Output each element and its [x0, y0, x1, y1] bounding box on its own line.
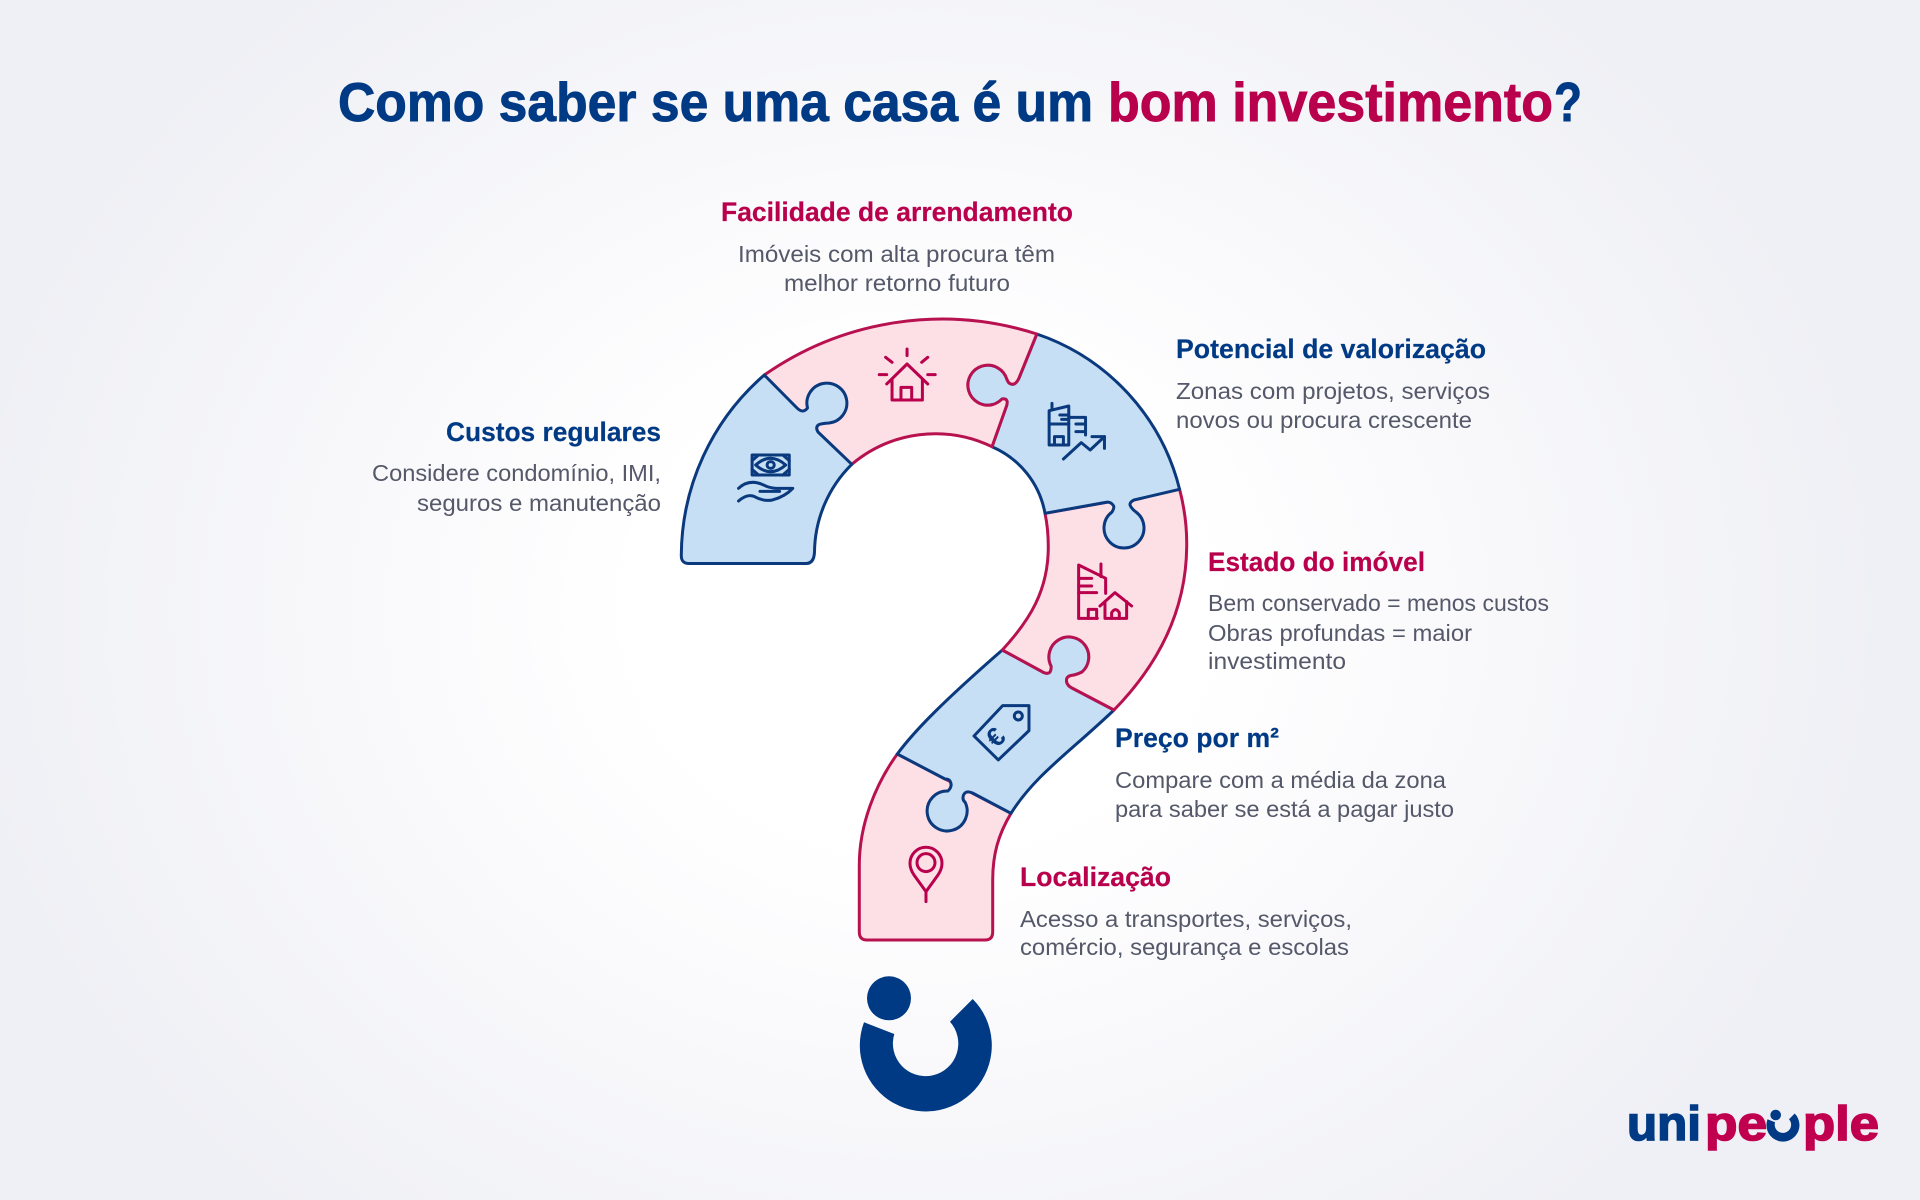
icon: buildings with rising chart	[1049, 403, 1104, 459]
logo: unipeople: pe	[1705, 1098, 1767, 1151]
text: localização: comércio, segurança e escolas	[1020, 934, 1349, 960]
title	[338, 71, 1582, 133]
question mark dot: logo symbol	[860, 976, 992, 1111]
text: custos regulares: Considere condomínio, IMI,	[372, 460, 661, 486]
text: localização	[1020, 862, 1352, 960]
text: estado do imóvel: Bem conservado = menos custos	[1208, 590, 1549, 616]
icon: money in hand	[739, 455, 793, 501]
icon: price tag with euro: €	[980, 721, 1012, 753]
text: estado do imóvel: Obras profundas = maior	[1208, 620, 1472, 646]
title: ?	[1554, 71, 1582, 133]
text: potencial de valorização: Potencial de valorização	[1176, 334, 1486, 364]
piece: localização	[859, 754, 1011, 940]
text: estado do imóvel: Estado do imóvel	[1208, 547, 1425, 577]
icon: location pin	[910, 847, 942, 902]
piece: estado do imóvel	[1002, 489, 1187, 710]
text: facilidade de arrendamento: Facilidade de arrendamento	[721, 197, 1073, 227]
text: facilidade de arrendamento: Imóveis com alta procura têm	[738, 241, 1055, 267]
text: facilidade de arrendamento	[721, 197, 1073, 296]
text: custos regulares: seguros e manutenção	[417, 490, 661, 516]
piece: facilidade de arrendamento	[764, 319, 1037, 464]
question mark puzzle	[681, 319, 1187, 940]
text: preço por m²	[1115, 723, 1454, 822]
title: Como saber se uma casa é um	[338, 71, 1093, 133]
icon: house with rays	[879, 349, 935, 400]
logo: unipeople: uni	[1627, 1098, 1701, 1151]
text: custos regulares: Custos regulares	[446, 417, 661, 447]
text: facilidade de arrendamento: melhor retorno futuro	[784, 270, 1010, 296]
icon: price tag with euro	[974, 706, 1029, 760]
text: estado do imóvel: investimento	[1208, 648, 1346, 674]
piece: preço por m²	[897, 637, 1114, 831]
text: potencial de valorização: Zonas com projetos, serviços	[1176, 378, 1490, 404]
logo: unipeople	[1627, 1098, 1879, 1151]
text: custos regulares	[372, 417, 661, 516]
text: preço por m²: Preço por m²	[1115, 723, 1279, 753]
text: preço por m²: para saber se está a pagar justo	[1115, 796, 1454, 822]
piece: potencial de valorização	[968, 334, 1180, 548]
text: preço por m²: Compare com a média da zona	[1115, 767, 1446, 793]
text: potencial de valorização	[1176, 334, 1490, 433]
logo: unipeople: ple	[1803, 1098, 1879, 1151]
text: localização: Acesso a transportes, serviços,	[1020, 906, 1352, 932]
text: estado do imóvel	[1208, 547, 1549, 674]
text: potencial de valorização: novos ou procura crescente	[1176, 407, 1472, 433]
title: bom investimento	[1108, 71, 1553, 133]
text: localização: Localização	[1020, 862, 1171, 892]
piece: custos regulares	[681, 375, 852, 564]
icon: building and house	[1079, 564, 1132, 618]
